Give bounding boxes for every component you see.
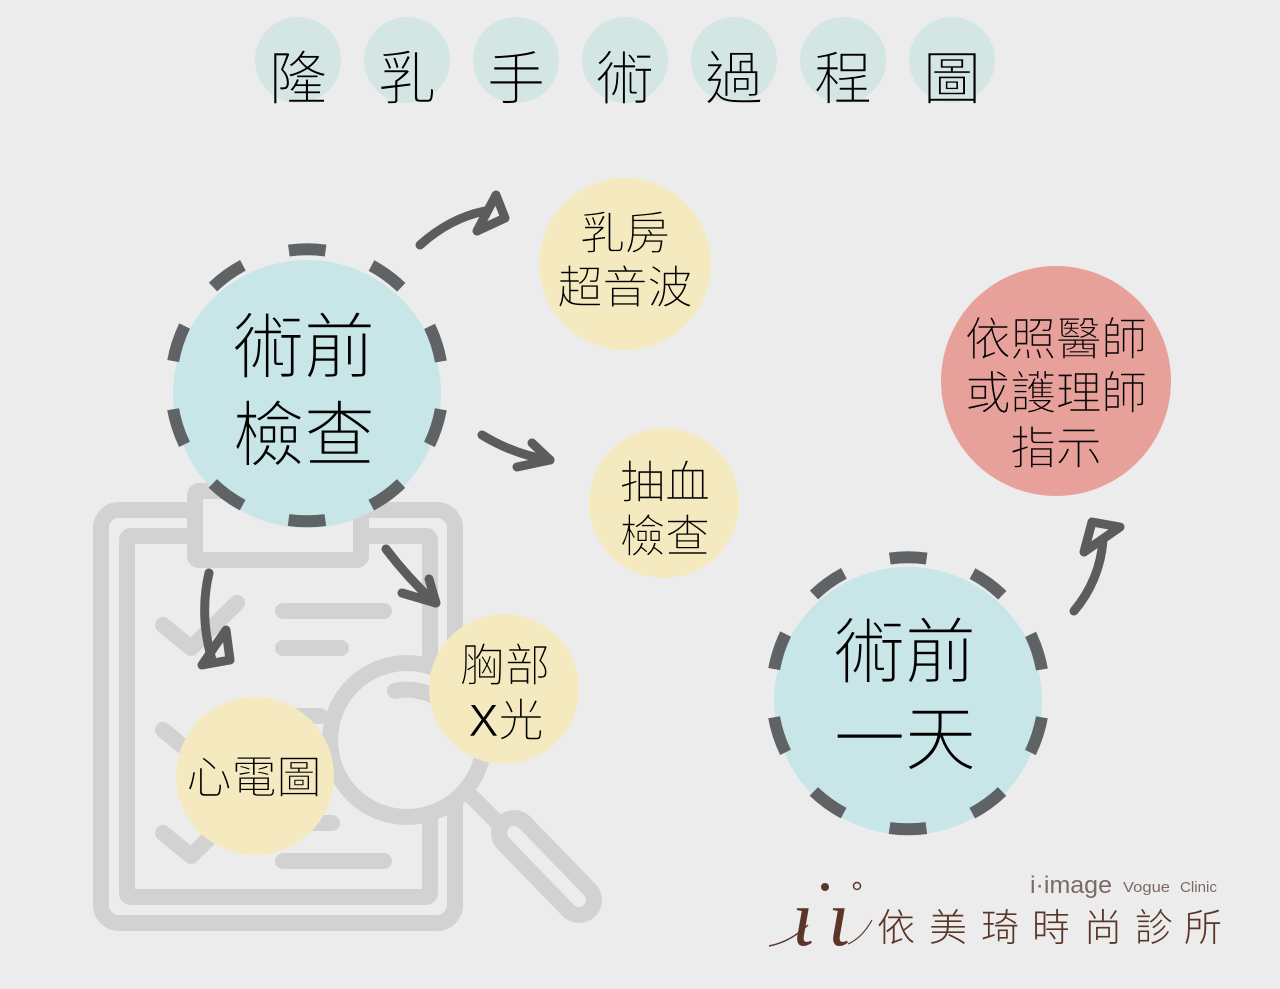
arrow: to ECG xyxy=(202,573,230,665)
panel: chest X-ray: X光 xyxy=(468,695,544,746)
icon: clipboard with magnifier xyxy=(101,491,579,923)
panel: follow instructions: 或護理師 xyxy=(965,368,1147,419)
panel: pre-op exams hub: 檢查 xyxy=(233,397,375,476)
logo: i-image Vogue Clinic: Vogue xyxy=(1123,879,1170,896)
panel: day before surgery xyxy=(772,557,1044,835)
panel: breast ultrasound: 乳房 xyxy=(580,208,670,259)
logo: i-image Vogue Clinic: Clinic xyxy=(1180,879,1217,896)
logo: i-image Vogue Clinic: i·image xyxy=(1030,872,1112,899)
title: 乳 xyxy=(378,47,436,112)
panel: blood test: 抽血 xyxy=(620,457,710,508)
title: 術 xyxy=(596,47,654,112)
logo: i-image Vogue Clinic: 依美琦時尚診所 xyxy=(877,908,1222,950)
title: 過 xyxy=(705,47,763,112)
arrow: to blood test xyxy=(482,435,550,467)
panel: chest X-ray: 胸部 xyxy=(460,640,550,691)
arrow: to chest X-ray xyxy=(386,549,436,603)
panel: pre-op exams hub: 術前 xyxy=(233,309,375,388)
panel: chest X-ray xyxy=(429,614,579,764)
panel: day before surgery: 一天 xyxy=(834,701,976,780)
panel: breast ultrasound xyxy=(539,178,711,350)
panel: follow instructions xyxy=(941,266,1171,496)
title: 手 xyxy=(487,47,545,112)
panel: ECG xyxy=(176,697,334,855)
panel: ECG: 心電圖 xyxy=(186,752,322,803)
panel: follow instructions: 指示 xyxy=(1010,423,1102,474)
panel: blood test xyxy=(589,428,739,578)
title: 程 xyxy=(814,47,872,112)
logo: i-image Vogue Clinic xyxy=(769,872,1222,963)
panel: blood test: 檢查 xyxy=(620,511,710,562)
panel: follow instructions: 依照醫師 xyxy=(965,314,1147,365)
arrow: to instructions xyxy=(1074,522,1120,611)
panel: day before surgery: 術前 xyxy=(834,614,976,693)
title xyxy=(255,17,995,112)
logo: i-image Vogue Clinic: ιι xyxy=(792,875,850,963)
title: 圖 xyxy=(923,47,981,112)
arrow: to breast ultrasound xyxy=(420,195,505,245)
panel: breast ultrasound: 超音波 xyxy=(557,262,693,313)
title: 隆 xyxy=(269,47,327,112)
panel: pre-op exams hub xyxy=(171,249,443,528)
